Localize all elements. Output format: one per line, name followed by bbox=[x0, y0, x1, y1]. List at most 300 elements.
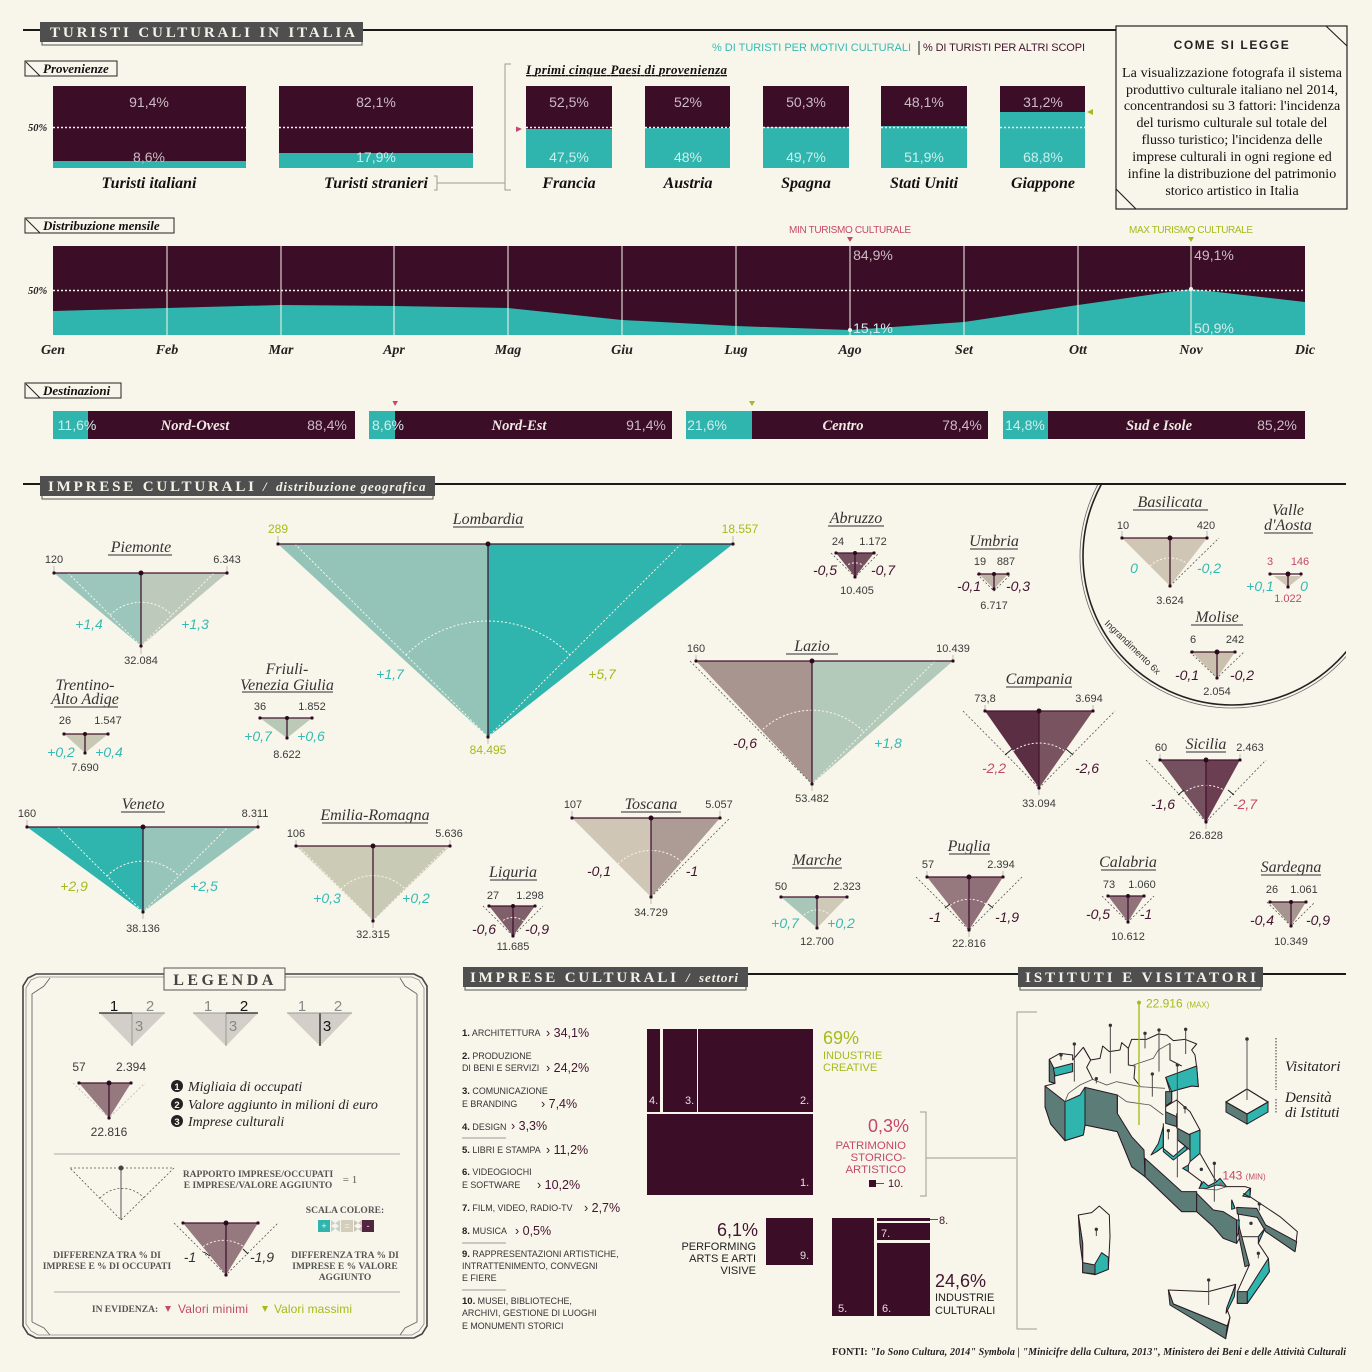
triangle: Lombardia: 289 bbox=[268, 522, 288, 536]
triangle: Umbria bbox=[957, 533, 1030, 612]
triangle: Friuli-Venezia Giulia: Venezia Giulia bbox=[240, 677, 334, 694]
triangle: Marche: +0,7 bbox=[771, 915, 800, 931]
chart: distribuzione mensile: 50% bbox=[28, 286, 48, 297]
triangle: Campania: 3.694 bbox=[1075, 693, 1103, 705]
panel: legenda: 3 bbox=[229, 1018, 237, 1035]
heading: imprese culturali settori bbox=[463, 967, 1012, 990]
panel: legenda: 2 bbox=[334, 998, 342, 1015]
text block: elenco settori: 9. RAPPRESENTAZIONI ARTISTICHE, bbox=[462, 1249, 619, 1260]
triangle: Piemonte: 6.343 bbox=[213, 554, 241, 566]
chart: distribuzione mensile: 84,9% bbox=[853, 247, 893, 263]
panel: primi cinque paesi: 49,7% bbox=[786, 149, 826, 165]
chart: distribuzione mensile bbox=[25, 218, 1316, 358]
legend: visitatori e densita istituti: di Istituti bbox=[1285, 1105, 1340, 1121]
legend: percentuale turisti: % DI TURISTI PER ALTRI SCOPI bbox=[923, 42, 1085, 54]
callout: patrimonio storico-artistico: PATRIMONIO bbox=[836, 1140, 906, 1152]
triangle: Liguria bbox=[472, 864, 549, 953]
panel: legenda: Imprese culturali bbox=[187, 1115, 284, 1130]
chart: treemap settori: 9. bbox=[800, 1250, 809, 1262]
heading: istituti e visitatori: ISTITUTI E VISITATORI bbox=[1025, 970, 1256, 986]
panel: primi cinque paesi: 52,5% bbox=[549, 94, 589, 110]
triangle: Basilicata: 420 bbox=[1197, 520, 1215, 532]
panel: provenienze: 91,4% bbox=[129, 94, 169, 110]
panel: provenienze: 8,6% bbox=[133, 149, 165, 165]
callout: performing arts: ARTS E ARTI bbox=[689, 1253, 756, 1265]
chart: distribuzione mensile: Distribuzione mensile bbox=[42, 218, 160, 233]
triangle: Emilia-Romagna: 5.636 bbox=[435, 828, 463, 840]
panel: legenda: DIFFERENZA TRA % DI bbox=[291, 1251, 399, 1261]
bracket: mappa bbox=[1017, 1012, 1037, 1329]
callout: patrimonio storico-artistico bbox=[836, 1112, 1016, 1196]
triangle: Calabria: 73 bbox=[1103, 879, 1115, 891]
pins: visitatori bbox=[1059, 1024, 1261, 1305]
triangle: Marche: 12.700 bbox=[800, 936, 834, 948]
panel: primi cinque paesi: 51,9% bbox=[904, 149, 944, 165]
triangle: Sardegna: -0,9 bbox=[1306, 912, 1330, 928]
callout: industrie culturali: INDUSTRIE bbox=[935, 1292, 994, 1304]
panel: provenienze: Turisti italiani bbox=[102, 175, 197, 192]
confini regionali bbox=[1065, 1043, 1258, 1237]
chart: destinazioni: Sud e Isole bbox=[1126, 418, 1193, 434]
triangle: Sicilia: 60 bbox=[1155, 742, 1167, 754]
triangle: Umbria: Umbria bbox=[969, 533, 1019, 550]
panel: legenda: AGGIUNTO bbox=[319, 1273, 371, 1283]
panel: come si legge: imprese culturali in ogni regione ed bbox=[1132, 150, 1332, 165]
triangle: Sardegna: -0,4 bbox=[1250, 912, 1274, 928]
pin minimo: 143: 143 bbox=[1222, 1168, 1243, 1182]
triangle: Lazio: +1,8 bbox=[874, 735, 902, 751]
panel: primi cinque paesi: Giappone bbox=[1011, 175, 1075, 192]
triangle: Sicilia: -2,7 bbox=[1233, 796, 1258, 812]
triangle: Friuli-Venezia Giulia bbox=[240, 661, 334, 761]
panel: legenda: IMPRESE E % DI OCCUPATI bbox=[43, 1262, 172, 1272]
triangle: Emilia-Romagna: Emilia-Romagna bbox=[319, 807, 430, 824]
triangle: Basilicata: 10 bbox=[1117, 520, 1129, 532]
callout: patrimonio storico-artistico: 0,3% bbox=[868, 1116, 909, 1136]
triangle: Trentino-Alto Adige: Trentino- bbox=[56, 677, 114, 694]
triangle: Puglia: 57 bbox=[922, 859, 934, 871]
triangle: Toscana: -1 bbox=[686, 863, 698, 879]
text block: elenco settori: 8. MUSICA bbox=[462, 1226, 507, 1237]
chart: treemap settori: 2. bbox=[800, 1095, 809, 1107]
panel: legenda: 3 bbox=[174, 1117, 180, 1128]
triangle: Veneto: +2,5 bbox=[190, 878, 218, 894]
text block: elenco settori: › 7,4% bbox=[541, 1097, 577, 1111]
panel: primi cinque paesi: 48,1% bbox=[904, 94, 944, 110]
panel: legenda: IN EVIDENZA: bbox=[92, 1305, 158, 1315]
panel: legenda bbox=[23, 968, 427, 1338]
chart: destinazioni: Destinazioni bbox=[42, 383, 111, 398]
triangle: Puglia: Puglia bbox=[947, 838, 990, 855]
panel: legenda: Valori massimi bbox=[274, 1302, 352, 1316]
panel: legenda: + bbox=[321, 1221, 327, 1231]
callout: performing arts bbox=[681, 1220, 758, 1277]
text block: elenco settori: › 24,2% bbox=[546, 1061, 589, 1075]
text block: elenco settori: E FIERE bbox=[462, 1273, 497, 1283]
text block: elenco settori: 2. PRODUZIONE bbox=[462, 1051, 532, 1062]
triangle: Umbria: 6.717 bbox=[980, 600, 1008, 612]
triangle: Basilicata: 3.624 bbox=[1156, 595, 1184, 607]
triangle: Trentino-Alto Adige: 26 bbox=[59, 715, 71, 727]
triangle: Emilia-Romagna: +0,2 bbox=[402, 890, 430, 906]
text block: elenco settori: › 34,1% bbox=[546, 1026, 589, 1040]
text block: elenco settori bbox=[462, 1026, 620, 1331]
chart: distribuzione mensile: MIN TURISMO CULTURALE bbox=[789, 225, 911, 236]
island: sicilia bbox=[1168, 1284, 1236, 1339]
triangle: Marche: Marche bbox=[791, 852, 842, 869]
triangle: Lombardia: +1,7 bbox=[376, 666, 405, 682]
panel: legenda: 57 bbox=[72, 1060, 86, 1074]
panel: provenienze: 50% bbox=[28, 123, 48, 134]
triangle: Puglia bbox=[916, 838, 1022, 950]
panel: legenda: Migliaia di occupati bbox=[187, 1080, 302, 1095]
panel: provenienze bbox=[25, 61, 511, 192]
chart: distribuzione mensile: Ott bbox=[1069, 343, 1088, 358]
triangle: Abruzzo: 24 bbox=[832, 536, 844, 548]
surface: penisola bbox=[1045, 1034, 1297, 1303]
triangle: Trentino-Alto Adige: 7.690 bbox=[71, 762, 99, 774]
triangle: Basilicata: 0 bbox=[1130, 560, 1138, 576]
triangle: Campania: 33.094 bbox=[1022, 798, 1056, 810]
text block: elenco settori: 6. VIDEOGIOCHI bbox=[462, 1167, 532, 1178]
panel: legenda: 3 bbox=[135, 1018, 143, 1035]
panel: come si legge: flusso turistico; l'incidenza delle bbox=[1142, 133, 1322, 148]
heading: turisti culturali in italia bbox=[23, 22, 1116, 45]
triangle: Veneto: +2,9 bbox=[60, 878, 88, 894]
chart: distribuzione mensile: Giu bbox=[611, 343, 633, 358]
chart: destinazioni: 78,4% bbox=[942, 417, 982, 433]
panel: come si legge bbox=[1116, 26, 1347, 209]
triangle: Piemonte: +1,4 bbox=[75, 616, 103, 632]
panel: come si legge: concentrandosi su 3 fattori: l'incidenza bbox=[1124, 99, 1341, 114]
chart: distribuzione mensile: Dic bbox=[1294, 343, 1316, 358]
heading: imprese culturali settori: IMPRESE CULTURALI bbox=[470, 970, 676, 986]
triangle: Friuli-Venezia Giulia: 36 bbox=[254, 701, 266, 713]
callout: patrimonio storico-artistico: 10. bbox=[888, 1178, 903, 1190]
triangle: Emilia-Romagna bbox=[287, 807, 463, 941]
triangle: Marche bbox=[771, 852, 861, 948]
triangle: Friuli-Venezia Giulia: +0,7 bbox=[244, 728, 273, 744]
heading: imprese culturali distribuzione geografica: distribuzione geografica bbox=[276, 479, 426, 494]
callout: performing arts: PERFORMING bbox=[681, 1241, 756, 1253]
panel: provenienze: 82,1% bbox=[356, 94, 396, 110]
panel: legenda: 2 bbox=[240, 998, 248, 1015]
panel: primi cinque paesi: 52% bbox=[674, 94, 702, 110]
legend: percentuale turisti: % DI TURISTI PER MOTIVI CULTURALI bbox=[712, 42, 911, 54]
panel: come si legge: La visualizzazione fotografa il sistema bbox=[1122, 66, 1343, 81]
triangle: Lombardia: Lombardia bbox=[452, 511, 523, 528]
pin massimo: 22.916: (MAX) bbox=[1187, 1000, 1210, 1009]
triangle: Marche: 2.323 bbox=[833, 881, 861, 893]
chart: destinazioni: 85,2% bbox=[1257, 417, 1297, 433]
panel: primi cinque paesi: 47,5% bbox=[549, 149, 589, 165]
text block: elenco settori: 3. COMUNICAZIONE bbox=[462, 1086, 548, 1097]
callout: industrie creative: CREATIVE bbox=[823, 1062, 877, 1074]
text block: fonti: FONTI: "Io Sono Cultura, 2014" Symbola | "Minicifre della Cultura, 2013", Ministero dei Beni e delle Attività Culturali bbox=[832, 1347, 1346, 1358]
panel: legenda: = 1 bbox=[343, 1174, 357, 1186]
map: italia istituti e visitatori bbox=[1045, 996, 1297, 1339]
heading: imprese culturali distribuzione geografica: / bbox=[262, 479, 268, 494]
triangle: Toscana: -0,1 bbox=[587, 863, 611, 879]
chart: destinazioni: 21,6% bbox=[687, 417, 727, 433]
triangle: Basilicata bbox=[1117, 494, 1221, 607]
triangle: Veneto: Veneto bbox=[122, 796, 164, 813]
legend: visitatori e densita istituti: Visitatori bbox=[1285, 1059, 1341, 1075]
chart: distribuzione mensile: 50,9% bbox=[1194, 320, 1234, 336]
triangle: Valle d'Aosta: d'Aosta bbox=[1264, 517, 1312, 534]
heading: imprese culturali settori: settori bbox=[698, 970, 738, 985]
text block: elenco settori: 7. FILM, VIDEO, RADIO-TV bbox=[462, 1203, 573, 1214]
chart: distribuzione mensile: Lug bbox=[723, 343, 748, 358]
triangle: Calabria: 10.612 bbox=[1111, 931, 1145, 943]
triangle: Campania: Campania bbox=[1006, 671, 1072, 688]
chart: distribuzione mensile: MAX TURISMO CULTURALE bbox=[1129, 225, 1253, 236]
panel: legenda: = bbox=[344, 1221, 350, 1231]
panel: primi cinque paesi: 48% bbox=[674, 149, 702, 165]
triangle: Emilia-Romagna: 32.315 bbox=[356, 929, 390, 941]
panel: primi cinque paesi: I primi cinque Paesi di provenienza bbox=[525, 62, 728, 77]
triangle: Trentino-Alto Adige bbox=[47, 677, 123, 774]
triangle: Sicilia: Sicilia bbox=[1186, 736, 1226, 753]
triangle: Liguria: Liguria bbox=[488, 864, 537, 881]
triangle: Veneto bbox=[18, 796, 268, 935]
panel: legenda: 1 bbox=[298, 998, 306, 1015]
triangle: Umbria: 887 bbox=[997, 556, 1015, 568]
triangle: Valle d'Aosta bbox=[1246, 502, 1313, 605]
triangle: Abruzzo: -0,7 bbox=[871, 562, 896, 578]
triangle: Molise: -0,1 bbox=[1175, 667, 1199, 683]
panel: legenda: SCALA COLORE: bbox=[306, 1206, 384, 1216]
panel: come si legge: storico artistico in Italia bbox=[1165, 184, 1299, 199]
triangle: Molise: 6 bbox=[1190, 634, 1196, 646]
panel: legenda: RAPPORTO IMPRESE/OCCUPATI bbox=[183, 1170, 333, 1180]
triangle: Marche: +0,2 bbox=[827, 915, 855, 931]
triangle: Puglia: -1,9 bbox=[995, 909, 1019, 925]
chart: destinazioni: Centro bbox=[822, 418, 864, 434]
panel: primi cinque paesi: 68,8% bbox=[1023, 149, 1063, 165]
triangle: Sardegna: Sardegna bbox=[1261, 859, 1321, 876]
callout: patrimonio storico-artistico: STORICO- bbox=[851, 1152, 906, 1164]
triangle: Trentino-Alto Adige: +0,2 bbox=[47, 744, 75, 760]
triangle: Campania: -2,6 bbox=[1075, 760, 1099, 776]
chart: treemap settori: 8. bbox=[939, 1215, 948, 1227]
panel: primi cinque paesi: 50,3% bbox=[786, 94, 826, 110]
triangle: Piemonte: +1,3 bbox=[181, 616, 209, 632]
triangle: Lombardia bbox=[268, 511, 759, 757]
triangle: Veneto: 38.136 bbox=[126, 923, 160, 935]
heading: imprese culturali distribuzione geografica: IMPRESE CULTURALI bbox=[48, 479, 254, 495]
triangle: Toscana bbox=[564, 796, 733, 919]
panel: legenda: -1 bbox=[184, 1249, 196, 1265]
panel: legenda: Valore aggiunto in milioni di euro bbox=[188, 1098, 378, 1113]
circle: ingrandimento 6x bbox=[1080, 485, 1346, 708]
triangle: Sicilia: -1,6 bbox=[1151, 796, 1175, 812]
text block: elenco settori: › 10,2% bbox=[537, 1178, 580, 1192]
triangle: Molise: 242 bbox=[1226, 634, 1244, 646]
panel: primi cinque paesi: 31,2% bbox=[1023, 94, 1063, 110]
callout: industrie creative: 69% bbox=[823, 1028, 859, 1048]
heading: imprese culturali settori: / bbox=[685, 970, 691, 985]
panel: primi cinque paesi: Francia bbox=[541, 175, 596, 192]
text block: elenco settori: 10. MUSEI, BIBLIOTECHE, bbox=[462, 1296, 572, 1307]
panel: legenda: 1 bbox=[110, 998, 118, 1015]
triangle: Lazio bbox=[687, 638, 970, 805]
chart: destinazioni: 14,8% bbox=[1005, 417, 1045, 433]
chart: treemap settori bbox=[647, 1029, 948, 1316]
triangle: Liguria: -0,6 bbox=[472, 921, 496, 937]
triangle: Umbria: -0,3 bbox=[1006, 578, 1030, 594]
triangle: Sardegna: 1.061 bbox=[1290, 884, 1318, 896]
triangle: Calabria: -0,5 bbox=[1086, 906, 1110, 922]
chart: destinazioni: 11,6% bbox=[58, 417, 96, 433]
text block: elenco settori: E BRANDING bbox=[462, 1099, 517, 1109]
triangle: Campania: -2,2 bbox=[982, 760, 1006, 776]
triangle: Abruzzo: Abruzzo bbox=[829, 510, 882, 527]
triangle: Sardegna bbox=[1250, 859, 1330, 948]
panel: provenienze: Turisti stranieri bbox=[324, 175, 428, 192]
triangle: Abruzzo: -0,5 bbox=[813, 562, 837, 578]
triangle: Trentino-Alto Adige: Alto Adige bbox=[50, 691, 119, 708]
panel: legenda: 2.394 bbox=[116, 1060, 146, 1074]
triangle: Abruzzo: 1.172 bbox=[859, 536, 887, 548]
callout: performing arts: 6,1% bbox=[717, 1220, 758, 1240]
text block: elenco settori: › 3,3% bbox=[511, 1119, 547, 1133]
chart: distribuzione mensile: Ago bbox=[837, 343, 862, 358]
chart: destinazioni: 91,4% bbox=[626, 417, 666, 433]
chart: distribuzione mensile: Apr bbox=[382, 343, 405, 358]
text block: elenco settori: E MONUMENTI STORICI bbox=[462, 1321, 563, 1331]
triangle: Puglia: 22.816 bbox=[952, 938, 986, 950]
text block: elenco settori: E SOFTWARE bbox=[462, 1180, 520, 1190]
text block: elenco settori: 4. DESIGN bbox=[462, 1122, 506, 1133]
triangle: Lombardia: +5,7 bbox=[588, 666, 617, 682]
triangle: Trentino-Alto Adige: +0,4 bbox=[95, 744, 123, 760]
triangle: Toscana: 107 bbox=[564, 799, 582, 811]
triangle: Valle d'Aosta: 0 bbox=[1300, 578, 1308, 594]
triangle: Calabria: Calabria bbox=[1099, 854, 1157, 871]
triangle: Liguria: 27 bbox=[487, 890, 499, 902]
chart: treemap settori: 5. bbox=[838, 1303, 847, 1315]
pin massimo: 22.916 bbox=[1137, 996, 1210, 1125]
triangle: Toscana: 5.057 bbox=[705, 799, 733, 811]
triangle: Lazio: Lazio bbox=[793, 638, 830, 655]
text block: elenco settori: 5. LIBRI E STAMPA bbox=[462, 1145, 541, 1156]
triangle: Basilicata: -0,2 bbox=[1197, 560, 1221, 576]
triangle: Valle d'Aosta: 1.022 bbox=[1274, 593, 1302, 605]
callout: industrie creative: INDUSTRIE bbox=[823, 1050, 882, 1062]
chart: destinazioni: 88,4% bbox=[307, 417, 347, 433]
triangle: Valle d'Aosta: Valle bbox=[1272, 502, 1304, 519]
panel: primi cinque paesi: Spagna bbox=[781, 175, 831, 192]
chart: destinazioni: Nord-Est bbox=[491, 418, 547, 434]
triangle: Liguria: 1.298 bbox=[516, 890, 544, 902]
panel: legenda: -1,9 bbox=[250, 1249, 274, 1265]
triangle: Calabria bbox=[1086, 854, 1157, 943]
legend: percentuale turisti bbox=[712, 41, 1085, 55]
triangle: Toscana: Toscana bbox=[625, 796, 677, 813]
text block: elenco settori: INTRATTENIMENTO, CONVEGNI bbox=[462, 1261, 598, 1271]
triangle: Lazio: 53.482 bbox=[795, 793, 829, 805]
pin massimo: 22.916: 22.916 bbox=[1146, 996, 1183, 1010]
triangle: Piemonte: 32.084 bbox=[124, 655, 158, 667]
triangle: Trentino-Alto Adige: 1.547 bbox=[94, 715, 122, 727]
chart: distribuzione mensile: Mag bbox=[494, 343, 521, 358]
triangle: Liguria: 11.685 bbox=[497, 941, 529, 953]
chart: distribuzione mensile: Gen bbox=[41, 343, 65, 358]
panel: provenienze: 17,9% bbox=[356, 149, 396, 165]
island: sardegna bbox=[1078, 1206, 1110, 1275]
panel: come si legge: infine la distribuzione del patrimonio bbox=[1128, 167, 1336, 182]
triangle: Friuli-Venezia Giulia: Friuli- bbox=[265, 661, 308, 678]
triangle: Veneto: 8.311 bbox=[242, 808, 268, 820]
callout: industrie creative bbox=[823, 1028, 882, 1074]
text block: elenco settori: ARCHIVI, GESTIONE DI LUOGHI bbox=[462, 1308, 597, 1318]
triangle: Valle d'Aosta: 3 bbox=[1267, 556, 1273, 568]
panel: primi cinque paesi bbox=[53, 62, 1093, 192]
triangle: Campania: 73,8 bbox=[974, 693, 996, 705]
triangle: Molise bbox=[1175, 609, 1254, 698]
panel: legenda: 1 bbox=[204, 998, 212, 1015]
callout: patrimonio storico-artistico: ARTISTICO bbox=[845, 1164, 906, 1176]
triangle: Molise: 2.054 bbox=[1203, 686, 1231, 698]
triangle: Umbria: 19 bbox=[974, 556, 986, 568]
panel: legenda: 3 bbox=[323, 1018, 331, 1035]
triangle: Lombardia: 84.495 bbox=[470, 743, 507, 757]
text block: elenco settori: 1. ARCHITETTURA bbox=[462, 1028, 541, 1039]
triangle: Valle d'Aosta: +0,1 bbox=[1246, 578, 1274, 594]
triangle: Friuli-Venezia Giulia: 8.622 bbox=[273, 749, 301, 761]
circle: ingrandimento 6x: Ingrandimento 6x bbox=[1102, 618, 1163, 677]
triangle: Friuli-Venezia Giulia: 1.852 bbox=[298, 701, 326, 713]
legend: visitatori e densita istituti bbox=[1226, 1037, 1341, 1124]
chart: distribuzione mensile: 49,1% bbox=[1194, 247, 1234, 263]
text block: elenco settori: › 11,2% bbox=[546, 1143, 588, 1157]
triangle: Emilia-Romagna: 106 bbox=[287, 828, 305, 840]
panel: legenda: LEGENDA bbox=[173, 972, 277, 989]
triangle: Toscana: 34.729 bbox=[634, 907, 668, 919]
triangle: Molise: -0,2 bbox=[1230, 667, 1254, 683]
heading: istituti e visitatori bbox=[1012, 967, 1346, 990]
panel: legenda: E IMPRESE/VALORE AGGIUNTO bbox=[184, 1181, 332, 1191]
triangle: Emilia-Romagna: +0,3 bbox=[313, 890, 341, 906]
triangle: Umbria: -0,1 bbox=[957, 578, 981, 594]
callout: industrie culturali: 24,6% bbox=[935, 1271, 986, 1291]
callout: performing arts: VISIVE bbox=[721, 1265, 756, 1277]
triangle: Lazio: 10.439 bbox=[936, 643, 970, 655]
chart: distribuzione mensile: Mar bbox=[268, 343, 294, 358]
triangle: Sicilia: 26.828 bbox=[1189, 830, 1223, 842]
panel: come si legge: COME SI LEGGE bbox=[1174, 38, 1290, 52]
triangle: Valle d'Aosta: 146 bbox=[1291, 556, 1309, 568]
triangle: Puglia: -1 bbox=[929, 909, 941, 925]
pin minimo: 143: (MIN) bbox=[1246, 1172, 1266, 1181]
triangle: Abruzzo: 10.405 bbox=[840, 585, 874, 597]
chart: destinazioni bbox=[25, 383, 1305, 439]
heading: imprese culturali distribuzione geografica bbox=[23, 476, 1346, 499]
heading: turisti culturali in italia: TURISTI CULTURALI IN ITALIA bbox=[50, 25, 355, 41]
triangle: Piemonte: 120 bbox=[45, 554, 63, 566]
triangle: Lazio: 160 bbox=[687, 643, 705, 655]
chart: treemap settori: 6. bbox=[882, 1303, 891, 1315]
triangle: Puglia: 2.394 bbox=[987, 859, 1015, 871]
panel: legenda: Valori minimi bbox=[178, 1302, 248, 1316]
triangle: Friuli-Venezia Giulia: +0,6 bbox=[297, 728, 325, 744]
triangle: Veneto: 160 bbox=[18, 808, 36, 820]
chart: destinazioni: Nord-Ovest bbox=[160, 418, 230, 434]
triangle: Calabria: 1.060 bbox=[1128, 879, 1156, 891]
panel: primi cinque paesi: Austria bbox=[663, 175, 712, 192]
triangle: Lombardia: 18.557 bbox=[722, 522, 759, 536]
